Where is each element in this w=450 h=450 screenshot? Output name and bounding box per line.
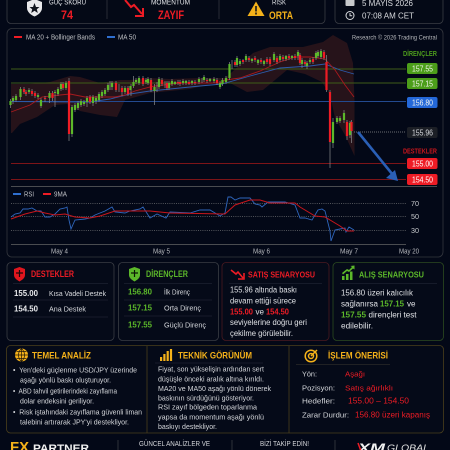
candlesticks (10, 49, 352, 168)
buy scenario text: 156.80 üzeri kalıcılık (341, 288, 413, 298)
bullet list: • Risk iştahındaki zayıflama güvenli liman (13, 408, 142, 416)
bullet list: talebini artırarak JPY'yi destekliyor. (20, 418, 129, 426)
icon: calendar (346, 0, 354, 6)
header: score cards (7, 0, 325, 24)
price tag: 154.50: 154.50 (412, 174, 433, 184)
sell scenario text (230, 286, 307, 338)
momentum value: ZAYIF (158, 10, 184, 22)
date axis labels: May 7 (340, 248, 358, 256)
buy scenario text: 157.15 (380, 300, 405, 308)
row: targets: Hedefler: (302, 396, 335, 406)
legend: 9MA (43, 192, 67, 198)
date axis labels: May 4 (51, 248, 68, 256)
price tag: current 155.96: 155.96 (412, 128, 433, 138)
bullet list: aşağı yönlü baskı oluşturuyor. (20, 376, 111, 384)
sell scenario text: 155.00 (230, 308, 254, 316)
icon: clock (346, 12, 354, 20)
row: position: Pozisyon: (302, 384, 335, 392)
arrow: expected decline (358, 132, 398, 181)
icon: shield (27, 0, 42, 16)
row: position (302, 384, 393, 392)
moving average 50 (11, 64, 354, 102)
support row 154.50: 154.50 (14, 304, 39, 314)
logo: XM Global (356, 441, 429, 450)
resistance row 157.55 (128, 320, 206, 330)
row: stop loss: Zarar Durdur: (302, 410, 349, 420)
legend: MA 20 and Bollinger Bands: MA 20 + Bollinger Bands (26, 34, 95, 42)
technical text: Fiyat, son yükselişin ardından sert (158, 364, 264, 374)
technical text: düşüşle önceki aralık altına kırıldı. (158, 374, 264, 384)
buy scenario text: 157.55 (341, 310, 367, 320)
panel: resistances (118, 262, 218, 340)
heading: technical view: TEKNİK GÖRÜNÜM (178, 350, 252, 360)
date axis labels: May 5 (153, 248, 170, 256)
date axis labels (51, 248, 419, 256)
panel: technical view (155, 349, 271, 431)
heading: buy scenario: ALIŞ SENARYOSU (359, 270, 424, 280)
resistance row 157.55: Güçlü Direnç (164, 320, 206, 330)
footer note: analyses: GÜNCEL ANALİZLER VE (139, 439, 210, 448)
support and resistance levels (11, 69, 406, 180)
RSI scale: 30: 30 (411, 226, 419, 235)
price tag: 157.55: 157.55 (412, 64, 433, 74)
sell scenario text: devam ettiği sürece (230, 296, 296, 306)
date axis labels: May 20 (399, 248, 419, 256)
resistance row 157.15: 157.15 (128, 304, 153, 312)
resistance row 156.80 (128, 288, 190, 296)
bullet list: dolar endeksini geriliyor. (20, 396, 94, 406)
sell scenario text: ve (256, 308, 264, 316)
technical text (158, 364, 271, 431)
RSI scale: 70: 70 (411, 199, 419, 208)
support row 155.00: Kısa Vadeli Destek (49, 289, 106, 298)
resistance row 157.15 (128, 304, 201, 312)
current price dotted line (354, 131, 406, 133)
strength value: 74 (61, 8, 73, 22)
price tag: 155.00: 155.00 (412, 158, 433, 168)
panel: analysis row frame (6, 346, 444, 433)
legend: 9MA: 9MA (54, 192, 67, 198)
resistance row 157.55: 157.55 (128, 320, 153, 330)
panel: fundamental analysis (13, 348, 142, 426)
support row 155.00 (14, 289, 106, 298)
RSI line (11, 197, 354, 241)
label: supports: DESTEKLER (403, 148, 437, 156)
RSI 9MA line (11, 200, 354, 231)
bollinger band area (11, 35, 354, 156)
legend: MA 50: MA 50 (118, 34, 136, 42)
sell scenario text: 154.50 (266, 308, 290, 316)
footer (10, 439, 429, 450)
icon: globe (15, 348, 28, 362)
icon: warning triangle (248, 2, 264, 16)
legend: RSI (13, 192, 34, 198)
risk value: ORTA (269, 10, 293, 22)
sell scenario text: 155.96 altında baskı (230, 286, 297, 294)
row: direction: Aşağı (345, 370, 365, 378)
bullet list (13, 366, 142, 426)
icon: red shield (14, 267, 25, 282)
bullet list: • Yen'deki güçlenme USD/JPY üzerinde (13, 366, 137, 374)
technical text: RSI zayıf bölgeden toparlanma (158, 402, 257, 412)
support row 154.50 (14, 304, 86, 314)
heading: supports: DESTEKLER (31, 269, 75, 279)
heading: fundamental analysis: TEMEL ANALİZ (32, 350, 91, 360)
panel: trade recommendation (296, 350, 430, 420)
date axis labels: May 6 (253, 248, 270, 256)
icon: target (305, 350, 317, 362)
technical text: baskının sürdüğünü gösteriyor. (158, 394, 254, 402)
icon: green shield (129, 267, 140, 282)
row: direction (302, 370, 365, 378)
resistance row 156.80: 156.80 (128, 288, 153, 296)
legend: RSI: RSI (24, 192, 34, 198)
buy scenario text: dirençleri test (368, 310, 417, 320)
date and time card (335, 0, 443, 24)
row: stop loss (302, 410, 430, 420)
price tag: 156.80: 156.80 (412, 98, 433, 108)
heading: resistances: DİRENÇLER (146, 269, 189, 279)
row: targets: 155.00 – 154.50 (348, 396, 409, 406)
icon: falling red arrow (231, 270, 244, 279)
icon: bars (160, 349, 172, 361)
moving average 20 (11, 57, 354, 112)
sell scenario text: çekilme görülebilir. (230, 329, 293, 338)
heading: trade recommendation: İŞLEM ÖNERİSİ (328, 350, 388, 360)
time: 07:08 AM CET (362, 10, 415, 20)
support row 155.00: 155.00 (14, 289, 39, 298)
row: targets (302, 396, 409, 406)
resistance row 156.80: İlk Direnç (164, 288, 190, 296)
technical text: yapsa da momentum aşağı yönlü (158, 412, 264, 422)
row: position: Satış ağırlıklı (345, 384, 393, 392)
panel: buy scenario (333, 262, 444, 340)
price tag: 157.15: 157.15 (412, 78, 433, 88)
buy scenario text: sağlanırsa (341, 300, 379, 308)
panel: sell scenario (222, 262, 329, 340)
heading: sell scenario: SATIŞ SENARYOSU (248, 270, 315, 280)
buy scenario text: ve (407, 300, 416, 308)
footer note: follow us: BİZİ TAKİP EDİN! (260, 439, 309, 448)
icon: shield star (30, 3, 40, 13)
technical text: MA20 ve MA50 aşağı yönlü dönerek (158, 384, 271, 393)
logo: FX Partner (10, 439, 89, 450)
resistance row 157.15: Orta Direnç (164, 304, 201, 312)
RSI scale: 50: 50 (411, 212, 419, 221)
panel: supports (7, 262, 114, 340)
label: resistances: DİRENÇLER (403, 50, 437, 58)
buy scenario text: edilebilir. (341, 322, 373, 330)
support row 154.50: Ana Destek (49, 304, 86, 314)
icon: falling arrow (125, 0, 143, 16)
row: stop loss: 156.80 üzeri kapanış (355, 410, 430, 420)
legend: MA 50 (107, 34, 136, 42)
icon: rising green chart (342, 266, 354, 280)
panel: price chart (7, 28, 443, 257)
technical text: baskıyı destekliyor. (158, 422, 217, 431)
row: direction: Yön: (302, 370, 317, 378)
sell scenario text: seviyelerine doğru geri (230, 318, 307, 327)
buy scenario text (341, 288, 417, 330)
bullet list: • ABD tahvil getirilerindeki zayıflama (13, 386, 117, 396)
